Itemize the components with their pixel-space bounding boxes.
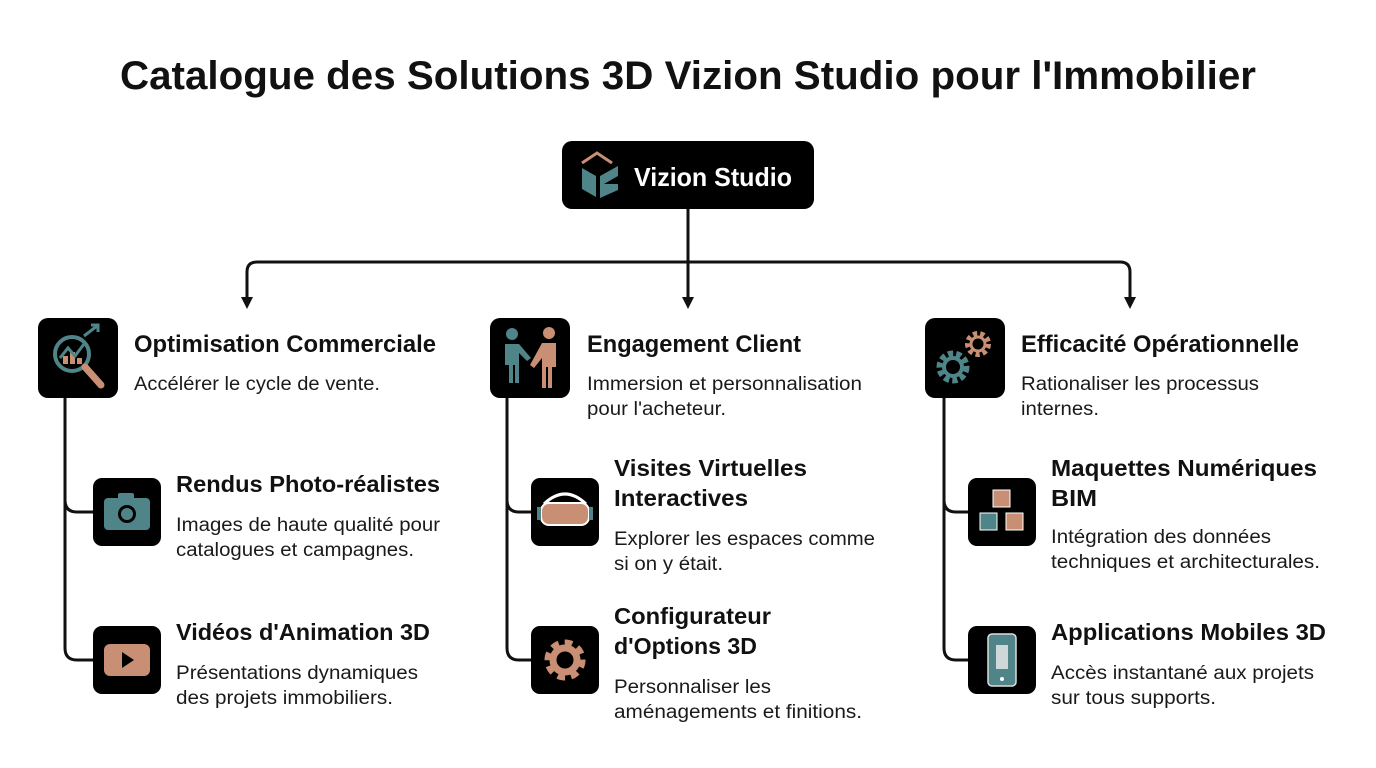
connector arrows [65, 209, 1136, 660]
icon: logo cube [582, 153, 618, 198]
item: Rendus Photo-réalistes: Rendus Photo-réalistes [176, 471, 440, 497]
title: Catalogue des Solutions 3D Vizion Studio pour l'Immobilier [120, 54, 1256, 98]
item: Rendus Photo-réalistes: Images de haute qualité pour [176, 515, 441, 536]
icon: camera [93, 478, 161, 546]
icon: chart magnifier [38, 318, 118, 398]
icon: smartphone [968, 626, 1036, 694]
item: Maquettes Numériques BIM: Maquettes Numériques [1051, 455, 1317, 481]
item: Applications Mobiles 3D: Applications Mobiles 3D [1051, 619, 1326, 645]
panel: Efficacité Opérationnelle [925, 318, 1299, 420]
root node: Vizion Studio [562, 141, 814, 209]
item: Maquettes Numériques BIM [968, 455, 1320, 573]
item: Vidéos d'Animation 3D: Vidéos d'Animation 3D [176, 619, 430, 645]
icon: play button [93, 626, 161, 694]
icon: handshake [490, 318, 570, 398]
item: Visites Virtuelles Interactives: Explorer les espaces comme [614, 529, 875, 550]
panel: Efficacité Opérationnelle: Efficacité Opérationnelle [1021, 331, 1299, 358]
panel: Optimisation Commerciale [38, 318, 436, 398]
item: Configurateur d'Options 3D: aménagements et finitions. [614, 702, 862, 723]
item: Configurateur d'Options 3D: Personnaliser les [614, 677, 771, 698]
panel: Efficacité Opérationnelle: internes. [1021, 399, 1099, 420]
item: Configurateur d'Options 3D [531, 603, 862, 723]
icon: gear [531, 626, 599, 694]
item: Applications Mobiles 3D: sur tous supports. [1051, 688, 1216, 709]
panel: Engagement Client: Engagement Client [587, 331, 801, 358]
root node: Vizion Studio: Vizion Studio [634, 162, 792, 192]
icon: gears [925, 318, 1005, 398]
item: Configurateur d'Options 3D: Configurateur [614, 603, 771, 629]
item: Visites Virtuelles Interactives: Visites Virtuelles [614, 455, 807, 481]
item: Configurateur d'Options 3D: d'Options 3D [614, 633, 757, 659]
item: Maquettes Numériques BIM: Intégration des données [1051, 527, 1271, 548]
panel: Efficacité Opérationnelle: Rationaliser les processus [1021, 374, 1259, 395]
item: Maquettes Numériques BIM: techniques et architecturales. [1051, 552, 1320, 573]
panel: Engagement Client: Immersion et personnalisation [587, 374, 862, 395]
item: Applications Mobiles 3D [968, 619, 1326, 709]
item: Maquettes Numériques BIM: BIM [1051, 485, 1097, 511]
panel: Optimisation Commerciale: Accélérer le cycle de vente. [134, 374, 380, 395]
item: Vidéos d'Animation 3D: des projets immobiliers. [176, 688, 393, 709]
panel: Optimisation Commerciale: Optimisation Commerciale [134, 331, 436, 358]
item: Applications Mobiles 3D: Accès instantané aux projets [1051, 663, 1314, 684]
item: Rendus Photo-réalistes: catalogues et campagnes. [176, 540, 414, 561]
item: Visites Virtuelles Interactives [531, 455, 875, 575]
panel: Engagement Client: pour l'acheteur. [587, 399, 726, 420]
item: Vidéos d'Animation 3D: Présentations dynamiques [176, 663, 418, 684]
panel: Engagement Client [490, 318, 862, 420]
item: Visites Virtuelles Interactives: si on y était. [614, 554, 723, 575]
icon: cubes [968, 478, 1036, 546]
item: Visites Virtuelles Interactives: Interactives [614, 485, 748, 511]
item: Vidéos d'Animation 3D [93, 619, 430, 709]
icon: VR headset [531, 478, 599, 546]
item: Rendus Photo-réalistes [93, 471, 441, 561]
